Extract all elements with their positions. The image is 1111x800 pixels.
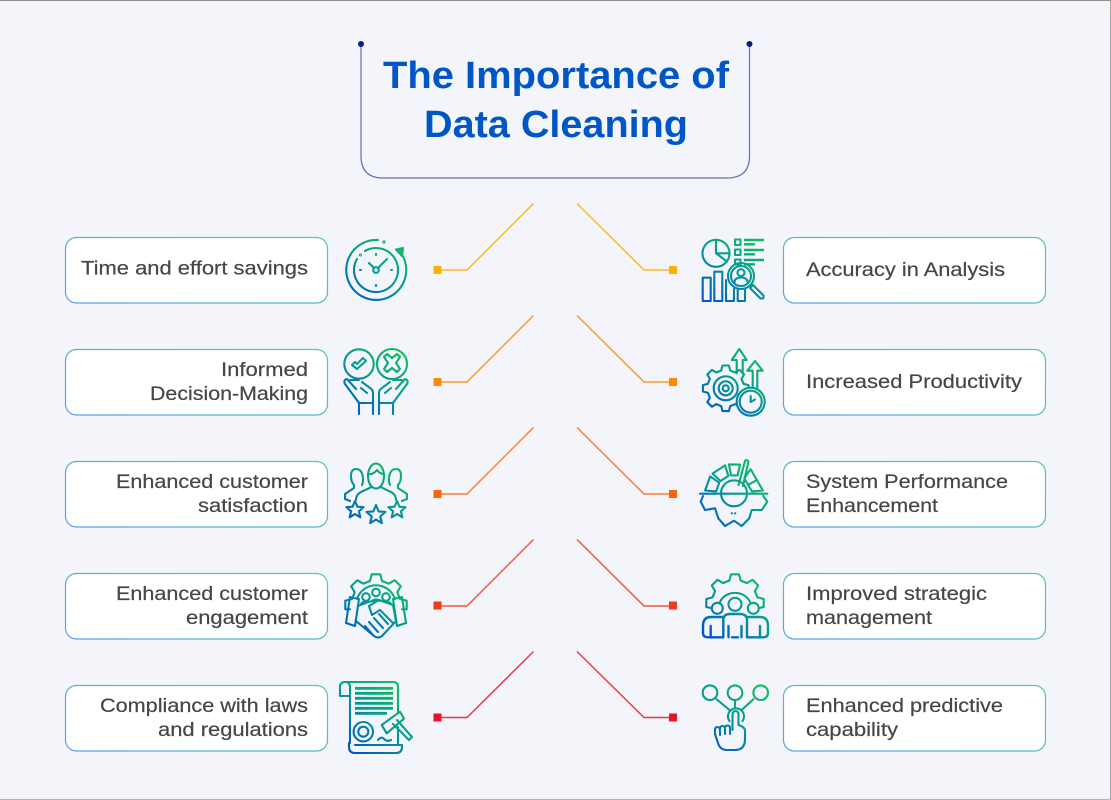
card: Improved strategic management: management bbox=[806, 607, 933, 629]
connector: row 5 left bbox=[434, 652, 534, 722]
card: System Performance Enhancement: System Performance bbox=[806, 471, 1008, 493]
icon: team with gear bbox=[703, 574, 768, 637]
card: Enhanced customer satisfaction bbox=[66, 462, 328, 527]
card: Enhanced predictive capability: capability bbox=[806, 719, 898, 741]
card: Compliance with laws and regulations bbox=[66, 686, 328, 751]
card: Compliance with laws and regulations: and regulations bbox=[158, 719, 308, 741]
card: System Performance Enhancement: Enhancement bbox=[806, 495, 939, 517]
title: The Importance of bbox=[383, 55, 729, 97]
icon: legal document with gavel bbox=[340, 682, 412, 753]
connector: row 2 right bbox=[577, 316, 677, 386]
card: Enhanced predictive capability bbox=[784, 686, 1046, 751]
connector: row 4 left bbox=[434, 540, 534, 610]
title bbox=[383, 55, 729, 146]
card: Increased Productivity bbox=[784, 350, 1046, 415]
connector: row 1 left bbox=[434, 204, 534, 274]
card: Enhanced customer engagement: Enhanced customer bbox=[116, 583, 309, 605]
card: Informed Decision-Making: Informed bbox=[221, 359, 308, 381]
card: Accuracy in Analysis: Accuracy in Analysis bbox=[806, 259, 1005, 281]
card: Enhanced customer satisfaction: Enhanced customer bbox=[116, 471, 309, 493]
icon: clock bbox=[346, 240, 406, 300]
icon: gear, clock and arrows bbox=[703, 349, 765, 416]
connector: row 1 right bbox=[577, 204, 677, 274]
connector: row 5 right bbox=[577, 652, 677, 722]
connector: row 3 left bbox=[434, 428, 534, 498]
card: Enhanced predictive capability: Enhanced predictive bbox=[806, 695, 1003, 717]
icon: analysis charts and magnifier bbox=[702, 240, 764, 301]
card: Time and effort savings bbox=[66, 238, 328, 303]
card: Informed Decision-Making: Decision-Making bbox=[150, 383, 308, 405]
card: Informed Decision-Making bbox=[66, 350, 328, 415]
connector: row 4 right bbox=[577, 540, 677, 610]
icon: performance gauge gear bbox=[700, 460, 767, 526]
connector: row 2 left bbox=[434, 316, 534, 386]
card: Enhanced customer engagement: engagement bbox=[186, 607, 309, 629]
card: Improved strategic management bbox=[784, 574, 1046, 639]
icon: gear with handshake bbox=[345, 574, 407, 638]
card: Accuracy in Analysis bbox=[784, 238, 1046, 303]
card: Compliance with laws and regulations: Compliance with laws bbox=[100, 695, 308, 717]
title: Data Cleaning bbox=[424, 104, 688, 146]
connector: row 3 right bbox=[577, 428, 677, 498]
card: Time and effort savings: Time and effort savings bbox=[81, 258, 308, 280]
icon: hands with check and cross bbox=[344, 349, 408, 414]
card: Enhanced customer satisfaction: satisfaction bbox=[198, 495, 308, 517]
card: Improved strategic management: Improved strategic bbox=[806, 583, 987, 605]
icon: customers with stars bbox=[345, 464, 407, 523]
title frame bbox=[358, 41, 752, 178]
card: System Performance Enhancement bbox=[784, 462, 1046, 527]
icon: finger touching network nodes bbox=[703, 685, 768, 750]
card: Enhanced customer engagement bbox=[66, 574, 328, 639]
card: Increased Productivity: Increased Productivity bbox=[806, 371, 1022, 393]
